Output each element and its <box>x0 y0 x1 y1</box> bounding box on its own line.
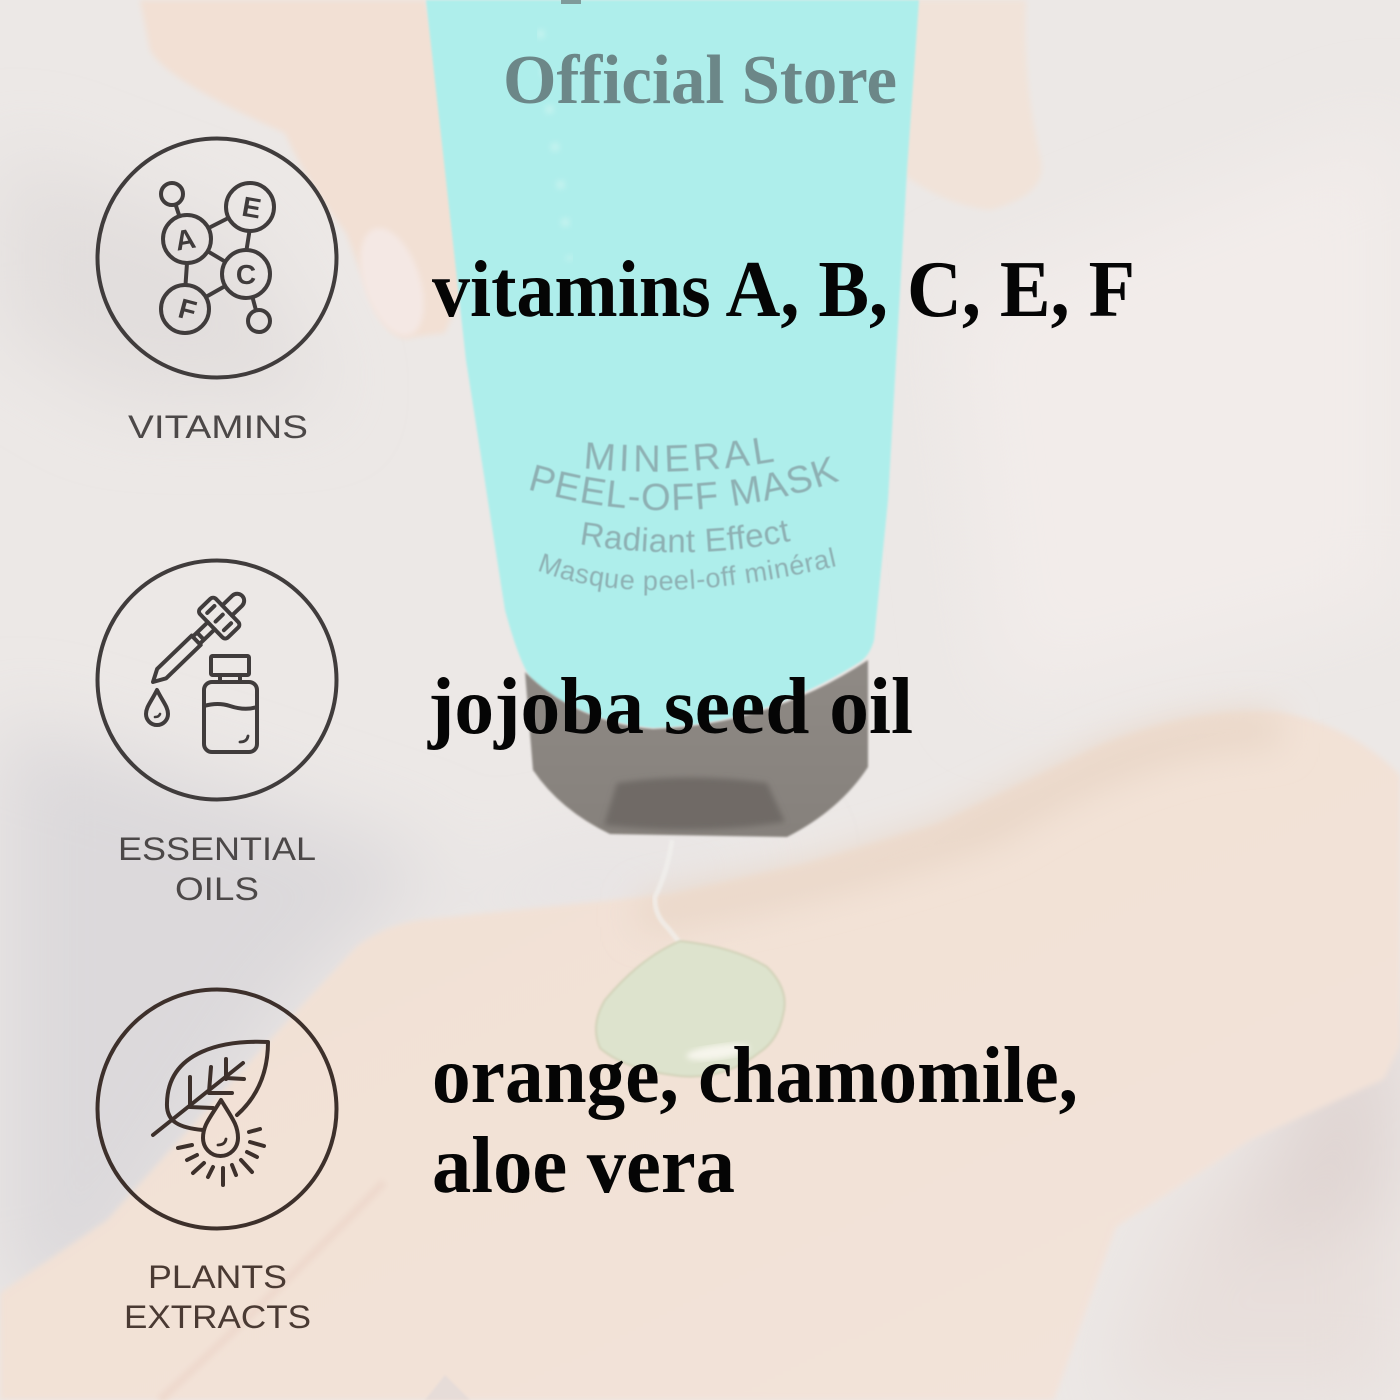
text: plant ingredients <box>432 1032 1078 1210</box>
icon: vitamin molecule: F <box>175 293 200 327</box>
left hand <box>140 0 480 338</box>
store heading: Official Store <box>503 42 897 119</box>
icon: vitamin molecule: A <box>173 223 198 257</box>
fingernail <box>348 220 436 344</box>
product text on tube: MINERAL <box>586 438 774 472</box>
serum highlight <box>685 1041 751 1063</box>
tube cap <box>525 660 868 837</box>
tube sparkle strip <box>540 30 570 260</box>
panel: plants extracts <box>98 990 336 1335</box>
serum blob <box>596 941 785 1076</box>
text: plant ingredients: orange, chamomile, <box>432 1032 1078 1120</box>
tube body <box>426 0 919 728</box>
icon: vitamin molecule <box>98 138 336 378</box>
product text on tube <box>530 438 840 596</box>
text: oil ingredient: jojoba seed oil <box>427 663 913 751</box>
tube top mark <box>561 0 581 4</box>
right fingers <box>904 0 1042 210</box>
forearm and hand <box>0 711 1400 1400</box>
text: plant ingredients: aloe vera <box>432 1122 735 1210</box>
icon: dropper and bottle <box>98 560 336 800</box>
label: essential oils <box>118 831 316 907</box>
product text on tube: PEEL-OFF MASK <box>530 456 840 511</box>
product text on tube: Radiant Effect <box>581 520 791 553</box>
finger gap <box>425 1375 470 1400</box>
panel: vitamins <box>98 138 336 445</box>
icon: leaf and drop <box>98 990 336 1228</box>
icon: vitamin molecule: E <box>240 191 264 225</box>
finger crease <box>160 1182 384 1400</box>
label: essential oils: ESSENTIAL <box>118 831 316 867</box>
label: plants extracts: EXTRACTS <box>124 1299 311 1335</box>
panel: essential oils <box>98 560 336 907</box>
product text on tube: Masque peel-off minéral <box>538 547 836 596</box>
label: vitamins: VITAMINS <box>128 409 308 445</box>
label: plants extracts: PLANTS <box>148 1259 287 1295</box>
text: vitamins list: vitamins A, B, C, E, F <box>432 246 1135 334</box>
label: plants extracts <box>124 1259 311 1335</box>
icon: vitamin molecule: C <box>236 259 256 290</box>
arm top shadow <box>640 713 1280 930</box>
cap tab <box>604 778 785 829</box>
label: essential oils: OILS <box>175 871 259 907</box>
serum strand <box>655 840 680 943</box>
